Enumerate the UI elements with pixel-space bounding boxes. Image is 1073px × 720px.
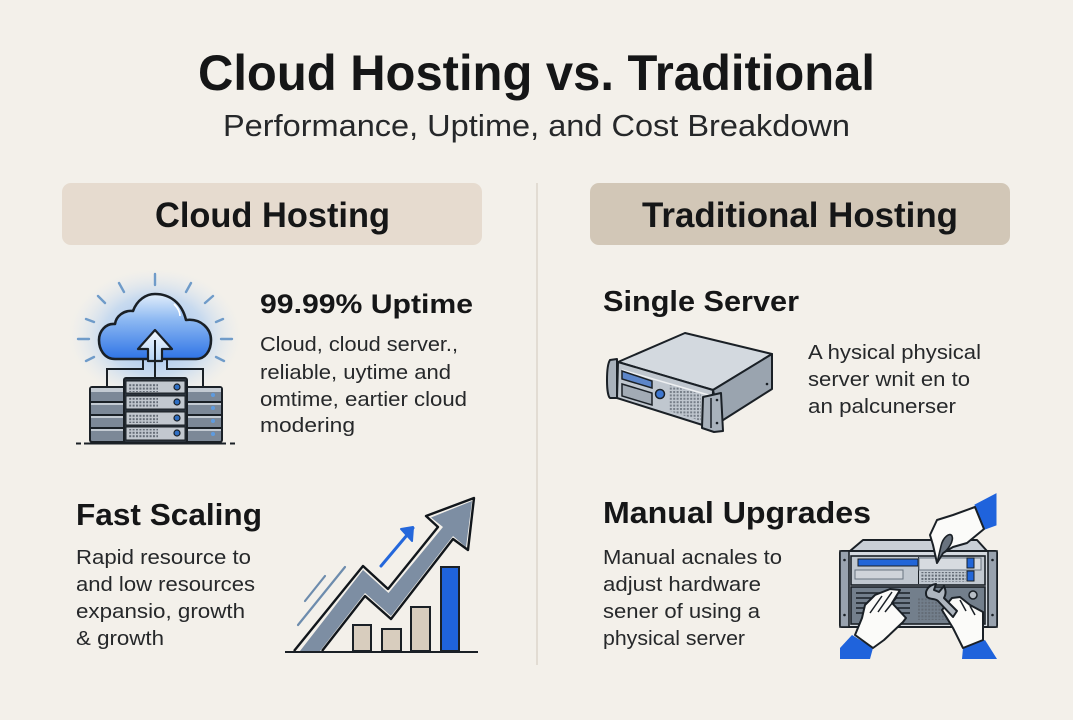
icon: growth chart with arrow [285, 498, 478, 652]
title: Cloud Hosting vs. Traditional [198, 45, 875, 101]
text block: fast scaling: Rapid resource to [76, 546, 251, 569]
text block: manual upgrades: Manual Upgrades [603, 495, 871, 530]
text block: fast scaling: expansio, growth [76, 600, 245, 623]
text block: 99.99% uptime: reliable, uytime and [260, 361, 451, 384]
text block: single server description: A hysical physical [808, 341, 981, 364]
icon: cloud with server stack [69, 269, 241, 444]
text block: single server heading: Single Server [603, 286, 799, 318]
panel: traditional hosting header [590, 183, 1010, 245]
panel: traditional hosting header: Traditional Hosting [642, 196, 958, 235]
text block: fast scaling: Fast Scaling [76, 497, 262, 532]
panel: cloud hosting header: Cloud Hosting [155, 196, 390, 235]
text block: fast scaling: & growth [76, 627, 164, 650]
icon: rack server [607, 333, 772, 432]
subtitle: Performance, Uptime, and Cost Breakdown [223, 108, 850, 143]
text block: single server description [808, 341, 981, 418]
text block: manual upgrades [603, 495, 871, 650]
text block: manual upgrades: Manual acnales to [603, 546, 782, 569]
text block: fast scaling [76, 497, 262, 650]
text block: 99.99% uptime [260, 289, 473, 437]
text block: 99.99% uptime: Cloud, cloud server., [260, 333, 458, 356]
icon: hands upgrading server [840, 494, 997, 659]
text block: 99.99% uptime: omtime, eartier cloud [260, 388, 467, 411]
text block: single server description: server wnit en to [808, 368, 970, 391]
text block: manual upgrades: adjust hardware [603, 573, 761, 596]
text block: 99.99% uptime: modering [260, 414, 355, 437]
text block: manual upgrades: sener of using a [603, 600, 761, 623]
text block: single server description: an palcunerser [808, 395, 956, 418]
panel: cloud hosting header [62, 183, 482, 245]
text block: fast scaling: and low resources [76, 573, 255, 596]
text block: manual upgrades: physical server [603, 627, 745, 650]
text block: 99.99% uptime: 99.99% Uptime [260, 289, 473, 319]
